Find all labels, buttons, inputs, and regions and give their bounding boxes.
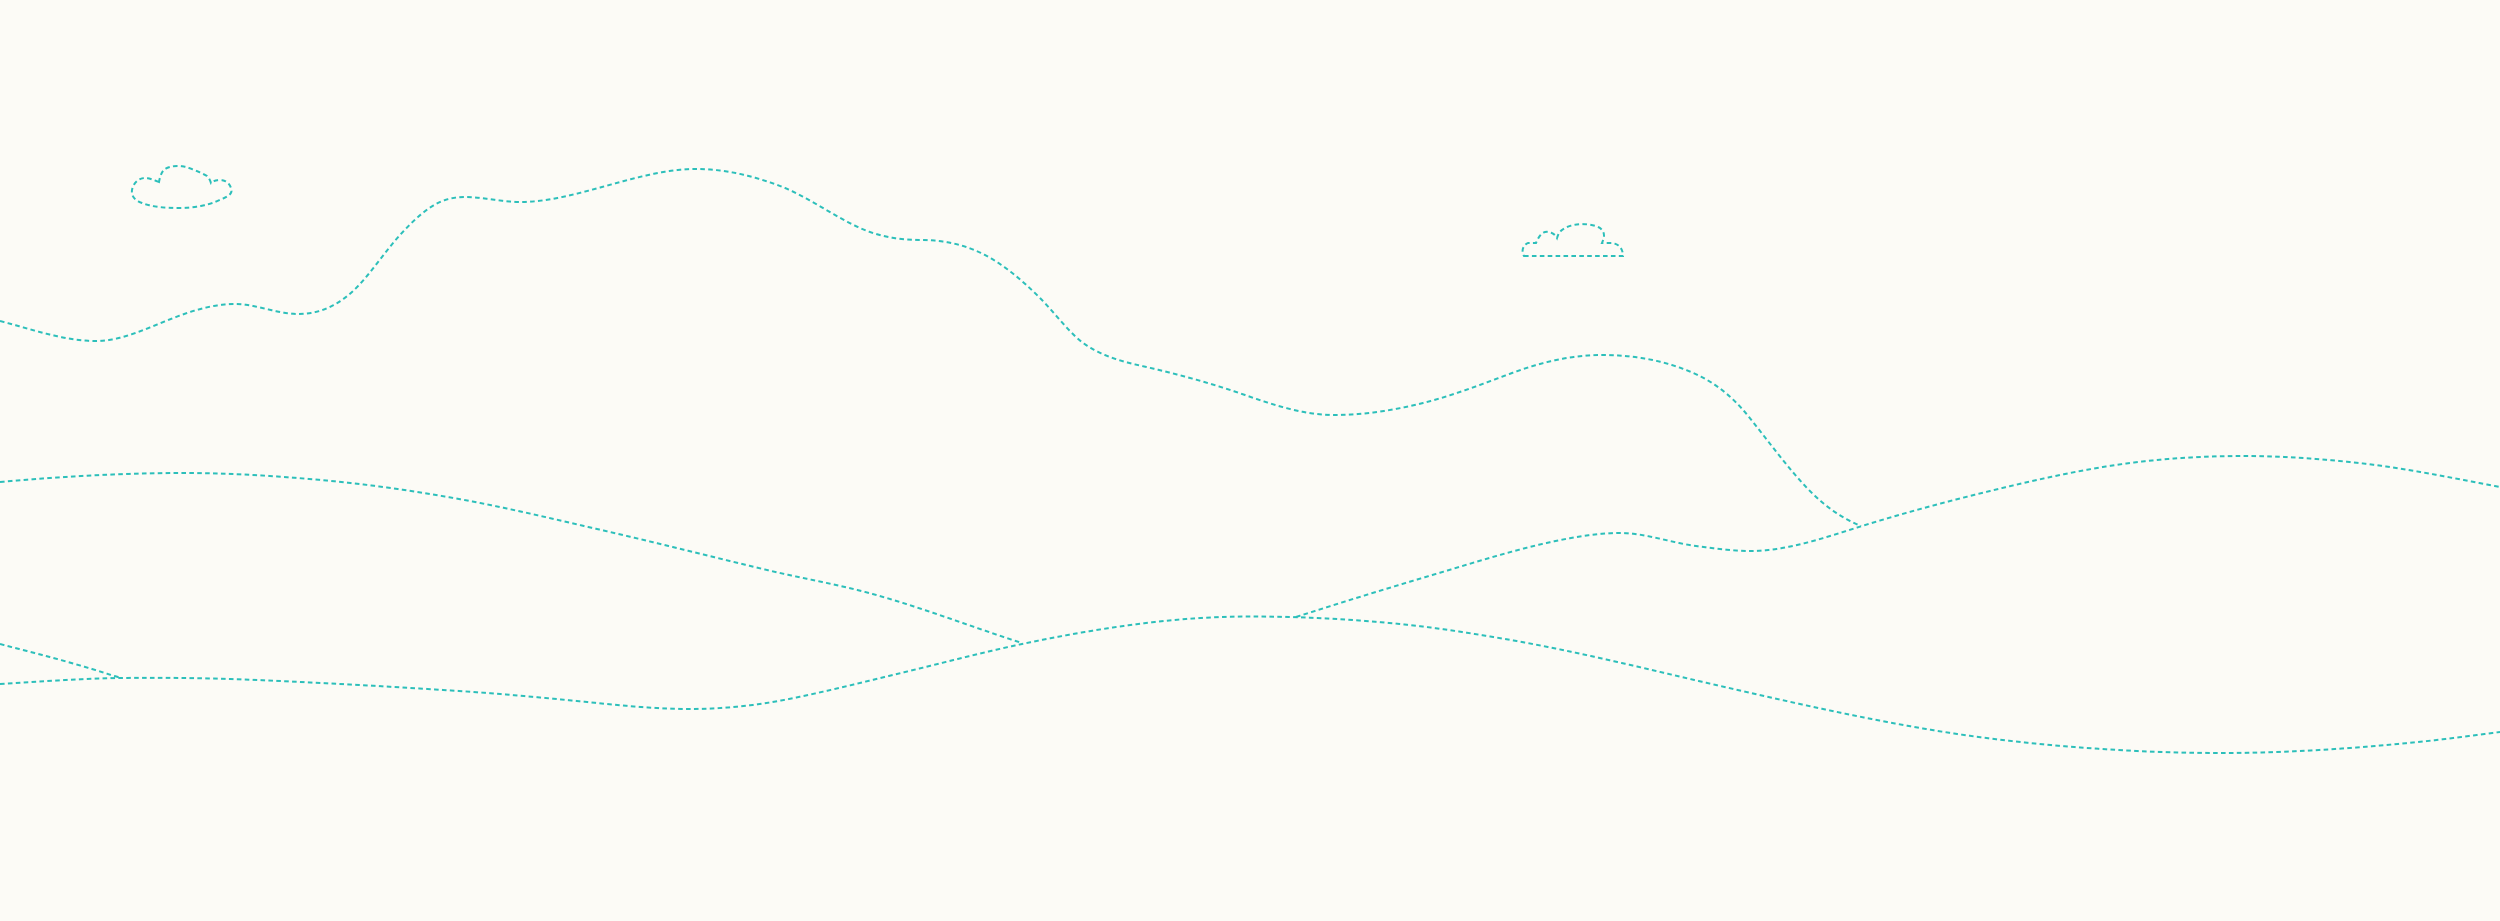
left distant hill line <box>0 473 1022 643</box>
icon: cloud right <box>1523 224 1623 256</box>
mountain ridge line <box>0 169 1861 526</box>
lower left hill line <box>0 644 122 678</box>
right distant hill line <box>1296 456 2500 617</box>
icon: cloud left <box>132 166 232 208</box>
foreground hill line <box>0 616 2500 753</box>
